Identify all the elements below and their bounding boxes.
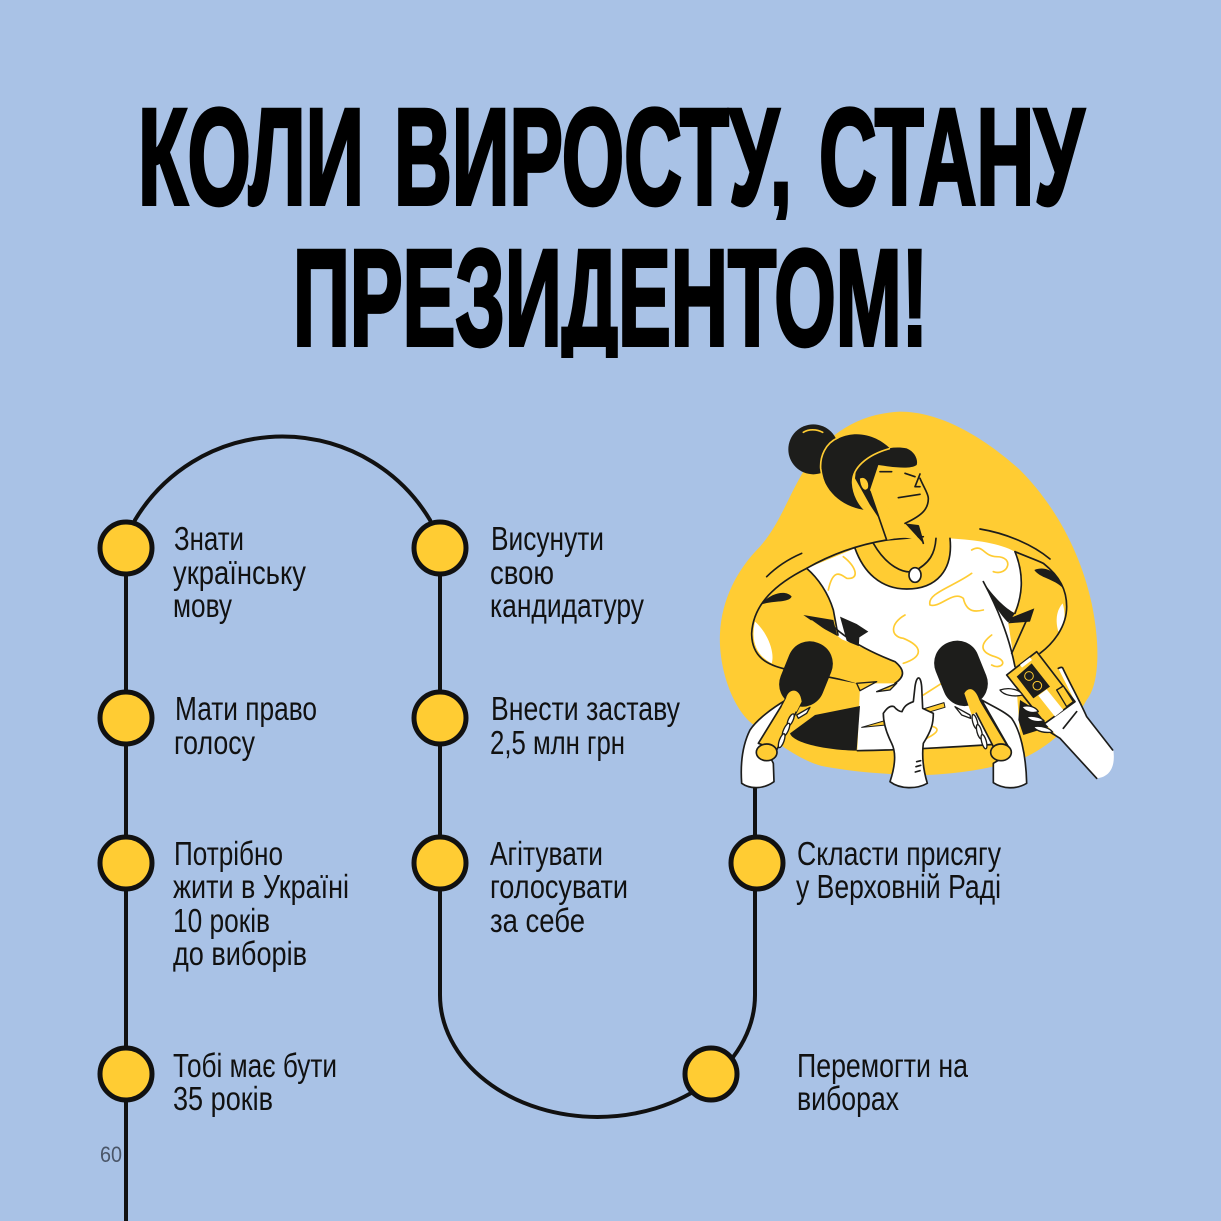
left fingers — [777, 707, 810, 748]
title: КОЛИ — [138, 81, 364, 234]
handle — [965, 689, 1010, 750]
handle neck — [964, 689, 983, 715]
step: know the language: мову — [173, 587, 232, 624]
step: know the language: Знати — [174, 520, 244, 557]
recorder — [1007, 652, 1075, 723]
pendant — [909, 568, 921, 582]
step: age: Тобі має бути — [173, 1047, 337, 1084]
base — [756, 744, 777, 761]
hand on hip — [857, 682, 897, 692]
recorder hand outline — [1047, 667, 1113, 778]
step: know the language — [173, 520, 306, 624]
step: residency: Потрібно — [174, 835, 283, 872]
shirt squiggles — [828, 548, 1008, 738]
handle neck — [782, 691, 802, 712]
reels — [1025, 672, 1042, 690]
head — [927, 634, 995, 713]
step: campaign: Агітувати — [490, 835, 603, 872]
necklace — [873, 538, 936, 572]
step: nominate: кандидатуру — [490, 587, 644, 624]
motion lines — [767, 529, 1050, 577]
step: campaign — [490, 835, 628, 939]
yellow blob — [720, 412, 1097, 775]
body — [1007, 652, 1075, 723]
step: oath — [796, 835, 1001, 905]
left microphone — [756, 635, 840, 761]
lower shirt shadow — [790, 706, 860, 751]
step: nominate: Висунути — [491, 520, 604, 557]
step: win: Перемогти на — [797, 1047, 969, 1084]
right hand — [982, 700, 1027, 788]
step: oath: у Верховній Раді — [796, 868, 1001, 905]
step: age: 35 років — [173, 1080, 273, 1117]
illustration: woman at press conference — [720, 412, 1114, 788]
right microphone — [927, 634, 1011, 761]
black shadow behind recorder — [1018, 700, 1050, 735]
recorder fingers — [1000, 689, 1053, 732]
step: nominate: свою — [490, 554, 554, 591]
step: know the language: українську — [173, 554, 306, 591]
right arm outline — [1012, 552, 1067, 653]
hair back — [821, 434, 890, 510]
left arm outline — [752, 537, 923, 683]
shirt — [807, 538, 1021, 751]
base — [991, 744, 1011, 761]
buttons — [1057, 686, 1073, 707]
step: age — [173, 1047, 337, 1117]
hair front — [855, 447, 917, 520]
step: win: виборах — [797, 1080, 899, 1117]
step: deposit: Внести заставу — [491, 690, 680, 727]
handle — [758, 691, 802, 750]
arm highlight — [754, 622, 773, 663]
left hand — [741, 700, 786, 788]
step: residency — [173, 835, 349, 972]
right fingers — [955, 707, 988, 749]
step: right to vote — [174, 690, 317, 761]
neck cover — [870, 492, 923, 543]
neck shadow — [905, 523, 923, 543]
page number: 60 — [100, 1142, 122, 1167]
stripe — [1038, 689, 1063, 717]
forearm — [800, 620, 902, 683]
step: right to vote: голосу — [174, 724, 255, 761]
step: deposit — [490, 690, 680, 761]
title — [142, 106, 1087, 358]
step: residency: жити в Україні — [173, 868, 349, 905]
right arm details — [983, 569, 1063, 623]
wrist marks — [915, 761, 921, 772]
screen — [1017, 663, 1050, 698]
timeline path — [126, 436, 755, 1221]
step: deposit: 2,5 млн грн — [490, 724, 625, 761]
step: win — [797, 1047, 969, 1117]
head — [772, 635, 840, 713]
right arm highlight — [1057, 603, 1064, 632]
timeline markers — [100, 522, 783, 1100]
ear — [859, 477, 869, 490]
step: campaign: голосувати — [490, 868, 628, 905]
forearm outline — [833, 627, 902, 683]
top stripe — [1020, 657, 1032, 668]
step: nominate — [490, 520, 644, 624]
step: campaign: за себе — [490, 902, 585, 939]
arm shadows — [760, 593, 868, 648]
step: residency: до виборів — [173, 935, 307, 972]
step: right to vote: Мати право — [175, 690, 317, 727]
pencil — [862, 703, 945, 727]
hair bun — [788, 424, 838, 474]
pointing hand — [883, 678, 933, 788]
step: residency: 10 років — [173, 902, 270, 939]
hair highlights — [803, 430, 889, 510]
face lines — [870, 472, 928, 543]
recorder hand — [1045, 667, 1114, 778]
title: ВИРОСТУ, — [394, 81, 792, 234]
step: oath: Скласти присягу — [797, 835, 1001, 872]
shirt outline — [807, 538, 1021, 751]
